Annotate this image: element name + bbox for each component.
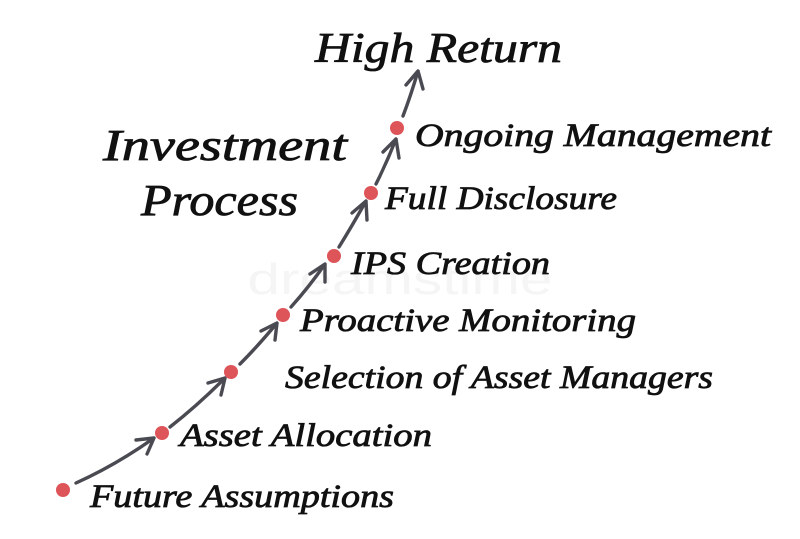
step labels [89, 118, 772, 515]
title: Investment Process [102, 121, 349, 225]
label: Proactive Monitoring: Proactive Monitoring [299, 303, 636, 339]
label: Full Disclosure: Full Disclosure [384, 181, 617, 217]
label: Future Assumptions: Future Assumptions [89, 479, 394, 515]
watermark: dreamstime [248, 255, 552, 304]
label: IPS Creation: IPS Creation [350, 246, 550, 282]
title: Investment Process: Process [140, 176, 298, 225]
title: Investment Process: Investment [102, 121, 349, 170]
label: Ongoing Management: Ongoing Management [415, 118, 772, 154]
milestone dots [56, 121, 404, 497]
arrow path [76, 71, 423, 483]
label: Asset Allocation: Asset Allocation [178, 418, 432, 454]
label: Selection of Asset Managers: Selection of Asset Managers [285, 360, 713, 396]
heading: High Return: High Return [314, 26, 562, 72]
